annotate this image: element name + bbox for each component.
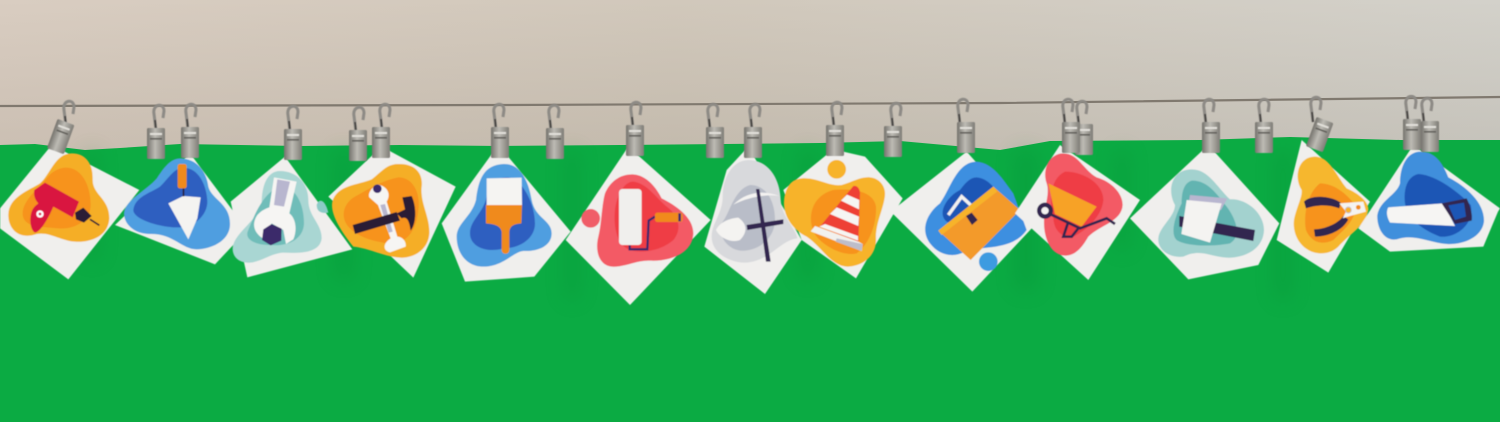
card 8: traffic cone [783, 149, 903, 278]
hammer and wrench icon [353, 184, 415, 252]
card 1: drill [0, 145, 139, 279]
brush icon [486, 178, 522, 254]
toolbox icon [938, 187, 1020, 260]
wheelbarrow icon [1037, 183, 1115, 237]
card 11: axe [1130, 145, 1279, 279]
card 7: pickaxe and shovel [704, 147, 802, 294]
card 4: wrench and hammer [328, 147, 456, 278]
pliers icon [1304, 197, 1366, 237]
wrench icon [254, 177, 297, 245]
card 13: hand saw [1358, 145, 1500, 252]
trowel icon [168, 164, 201, 239]
cone icon [811, 186, 863, 251]
dot [827, 160, 846, 179]
dot [581, 209, 600, 228]
pick and shovel icon [716, 189, 783, 262]
card 10: wheelbarrow [1015, 145, 1140, 280]
card 12: pliers [1277, 140, 1370, 273]
drill icon [30, 183, 99, 233]
card 3: wrench and bolt [231, 157, 352, 277]
card 5: paint brush [442, 145, 571, 282]
dot [979, 252, 998, 271]
card 9: toolbox [891, 152, 1033, 292]
axe icon [1179, 195, 1255, 243]
card 2: trowel [115, 153, 247, 264]
wall background [0, 0, 1500, 160]
wire [0, 97, 1500, 106]
metal clips [47, 96, 1439, 161]
green curtain [0, 137, 1500, 422]
card 6: paint roller [566, 147, 711, 305]
roller icon [619, 189, 683, 249]
saw icon [1387, 198, 1472, 226]
